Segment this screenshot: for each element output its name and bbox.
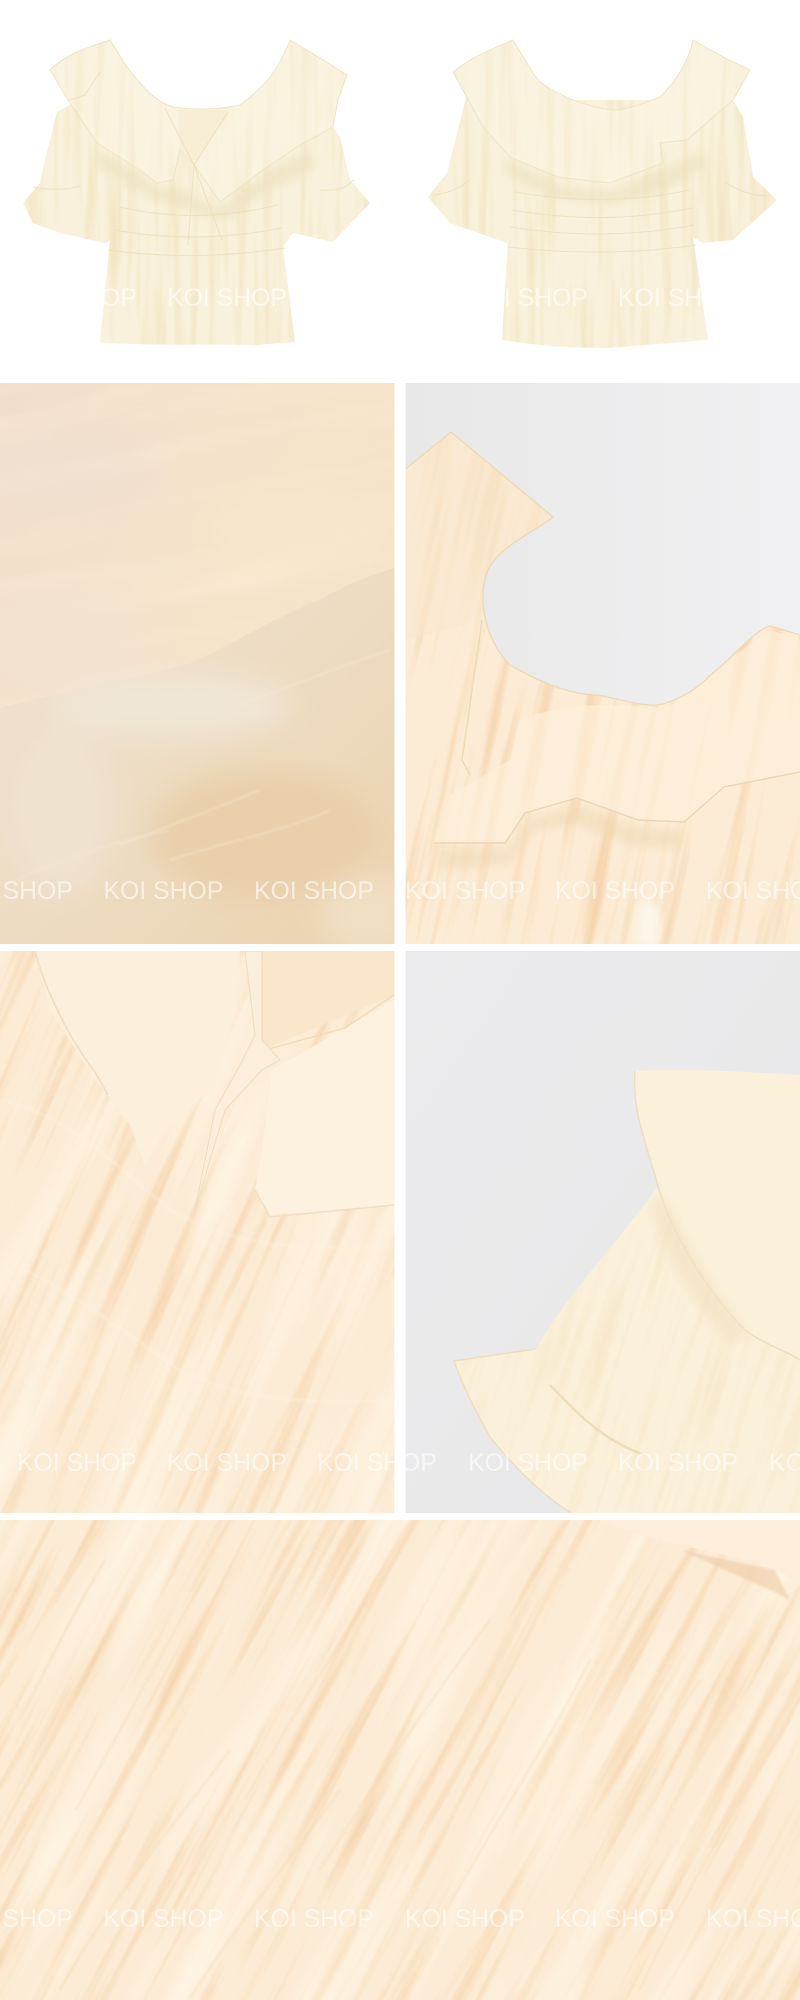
ruffle overlay — [434, 630, 800, 843]
watermark row 2: KOI SHOP — [254, 878, 374, 905]
cuff gather — [550, 1385, 645, 1455]
smocking rows — [30, 1112, 336, 1402]
panel: smocked fabric close-up — [0, 1520, 800, 2000]
shadow under back ruffle — [505, 150, 705, 205]
right collar flap — [255, 1000, 394, 1215]
tie knot — [195, 951, 280, 1210]
watermark row 1: KOI SHOP — [468, 285, 588, 312]
watermark row 4 — [0, 1906, 800, 1933]
watermark row 1: KOI SHOP — [167, 285, 287, 312]
back collar ruffle — [453, 40, 750, 183]
upper gathered fabric — [262, 951, 394, 1047]
sleeve fold — [0, 568, 394, 944]
watermark row 1: KOI SHOP — [618, 285, 738, 312]
watermark row 4: KOI SHOP — [254, 1906, 374, 1933]
watermark row 1: KOI SHOP — [17, 285, 137, 312]
watermark row 4: KOI SHOP — [555, 1906, 675, 1933]
panel: front view of blouse — [23, 40, 370, 345]
watermark row 1 — [17, 285, 800, 312]
sleeve seam — [635, 1071, 800, 1360]
watermark row 3: KOI SHOP — [468, 1450, 588, 1477]
front collar ruffle — [50, 40, 347, 202]
back texture — [428, 93, 777, 348]
watermark row 3: KOI SHOP — [618, 1450, 738, 1477]
cuff edge — [454, 1349, 571, 1513]
left collar flap — [35, 951, 240, 1165]
watermark row 3 — [17, 1450, 800, 1477]
panel: fabric close-up — [0, 383, 420, 955]
watermark row 4: KOI SHOP — [405, 1906, 525, 1933]
major folds — [20, 1560, 790, 1998]
front texture — [23, 105, 370, 345]
front V opening — [178, 110, 227, 163]
panel: sleeve on grey background — [406, 951, 800, 1520]
watermark row 2: KOI SHOP — [555, 878, 675, 905]
panel: neckline close-up — [405, 383, 800, 949]
corner collar flap — [600, 1520, 800, 1585]
watermark row 2 — [0, 878, 800, 905]
shadow under front ruffle — [95, 148, 316, 222]
watermark row 2: KOI SHOP — [104, 878, 223, 905]
watermark row 1: KOI SHOP — [317, 285, 437, 312]
watermark row 3: KOI SHOP — [167, 1450, 287, 1477]
back collar texture — [453, 40, 750, 183]
tie string — [462, 620, 482, 775]
watermark row 4: KOI SHOP — [104, 1906, 223, 1933]
front smocking and tie — [33, 72, 353, 256]
front collar texture — [50, 40, 347, 202]
front sleeves and body — [23, 105, 370, 345]
panel: back view of blouse — [428, 40, 777, 348]
shadow under ruffle — [440, 805, 684, 870]
soft shadow by collar — [652, 1199, 746, 1340]
back smocking — [435, 180, 770, 252]
gap between fabric — [636, 901, 660, 949]
watermark row 3: KOI SHOP — [317, 1450, 437, 1477]
ruffle hem edge — [434, 772, 800, 843]
back sleeves and body — [428, 93, 777, 348]
panel: tie and smocking close-up — [0, 951, 394, 1513]
neckline edge — [406, 432, 800, 705]
watermark row 2: KOI SHOP — [405, 878, 525, 905]
watermark row 3: KOI SHOP — [17, 1450, 137, 1477]
